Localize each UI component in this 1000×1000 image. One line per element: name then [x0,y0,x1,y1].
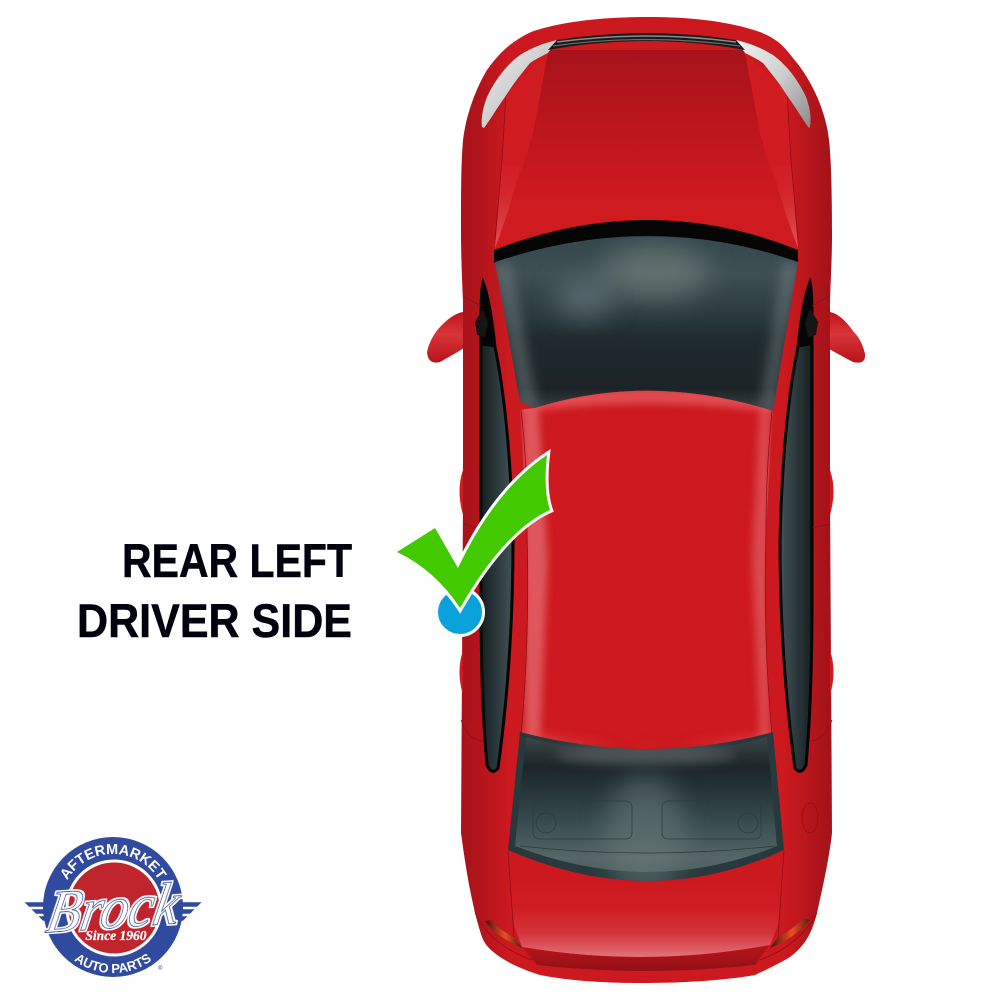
car: door handles and seams [460,296,834,741]
car: headlights [482,40,811,128]
label: rear left driver side [77,534,352,647]
logo: arc text top: AFTERMARKET [61,844,167,880]
logo: red centre [67,861,161,955]
car: front grille [548,33,745,50]
logo: registered mark: ® [158,965,163,972]
car illustration: top view [427,17,865,983]
car: side window left [481,282,513,771]
car: rear window [508,732,784,895]
car: trunk [508,851,784,957]
logo: Brock script: Brock [42,870,186,947]
logo: Brock Aftermarket Auto Parts [24,837,202,977]
logo: wings [24,902,202,928]
location marker: blue dot [436,588,484,636]
car: windshield band [494,220,798,263]
car: mirrors [427,312,865,363]
car: tail lights [475,913,817,960]
label: rear left driver side: REAR LEFT [122,534,352,587]
car: trunk seams [508,851,784,937]
car: mirror mounts [475,308,818,337]
logo: since 1960: Since 1960 [85,928,147,943]
car: hood [494,50,798,250]
car: windshield [495,236,798,411]
label: rear left driver side: DRIVER SIDE [77,594,352,647]
car: body shell [461,17,832,983]
car: side window right [780,282,812,771]
car: fuel cap [802,803,818,833]
icon: green check mark [397,455,550,608]
logo: blue ring [43,837,183,977]
car: rear bumper shade [522,945,770,971]
car: roof [520,388,775,750]
logo: arc text bottom: AUTO PARTS [74,954,151,974]
